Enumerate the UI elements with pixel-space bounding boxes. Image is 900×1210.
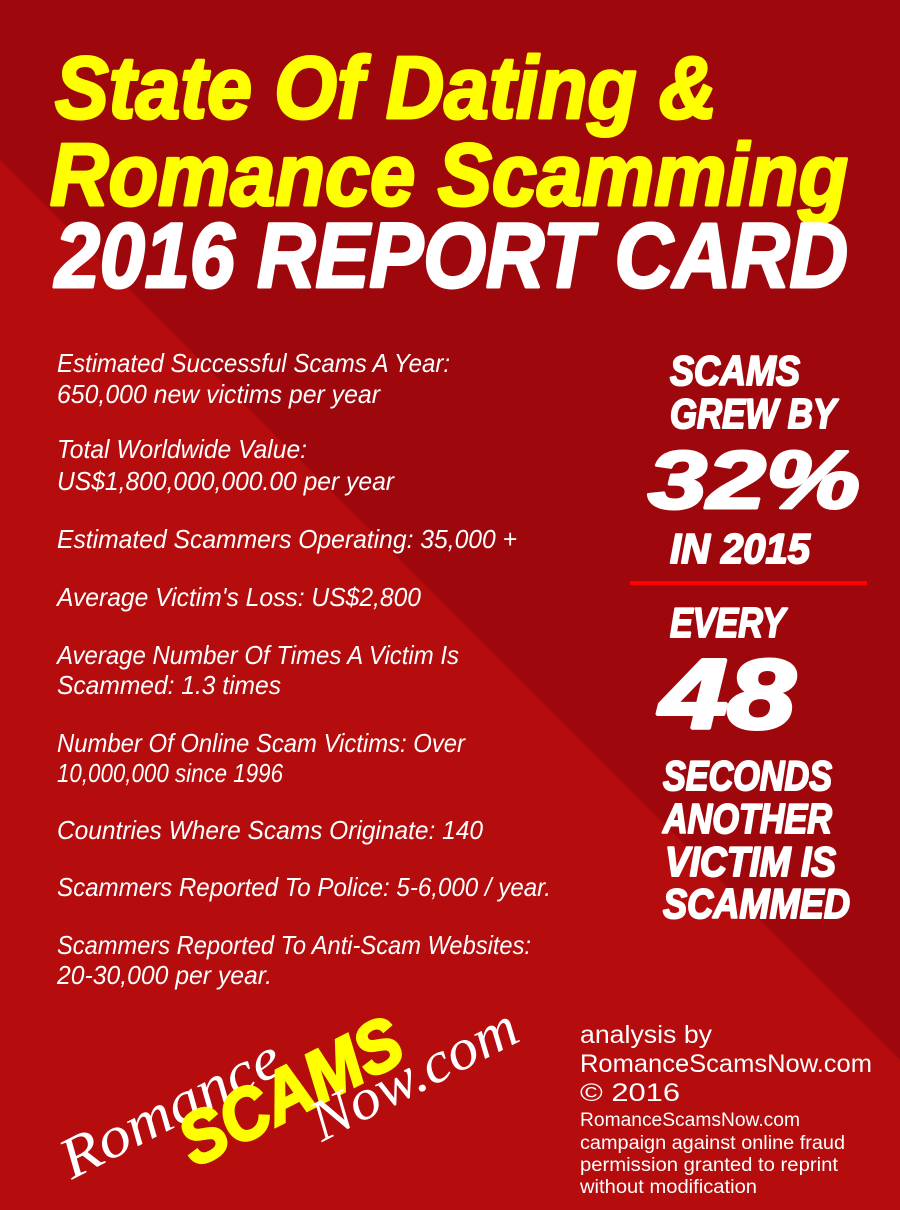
- credits: [579, 1021, 872, 1198]
- credits: © 2016: [580, 1079, 680, 1107]
- callout: growth: IN 2015: [670, 525, 811, 572]
- logo: Now.com: [297, 994, 528, 1154]
- logo: Romance: [47, 1024, 292, 1192]
- callout: growth: GREW BY: [670, 390, 839, 437]
- stats list: Countries Where Scams Originate: 140: [57, 815, 484, 845]
- stats list: Average Number Of Times A Victim Is: [55, 640, 459, 670]
- stats list: Estimated Successful Scams A Year:: [57, 348, 450, 378]
- callout: every 48 seconds: ANOTHER: [662, 795, 833, 842]
- callout: every 48 seconds: SCAMMED: [663, 880, 850, 927]
- stats list: 10,000,000 since 1996: [57, 758, 283, 788]
- logo: SCAMS: [166, 1002, 416, 1182]
- stats list: 20-30,000 per year.: [56, 960, 272, 990]
- stats list: Scammers Reported To Anti-Scam Websites:: [57, 930, 531, 960]
- stats list: Scammed: 1.3 times: [57, 670, 281, 700]
- title: Romance Scamming: [50, 125, 848, 224]
- stats list: Scammers Reported To Police: 5-6,000 / year.: [57, 872, 551, 902]
- credits: RomanceScamsNow.com: [580, 1050, 872, 1078]
- logo: [47, 922, 528, 1210]
- title: [50, 38, 848, 307]
- callout: every 48 seconds: SECONDS: [663, 752, 832, 799]
- stats list: US$1,800,000,000.00 per year: [57, 466, 395, 496]
- stats list: Estimated Scammers Operating: 35,000 +: [57, 524, 517, 554]
- credits: campaign against online fraud: [580, 1133, 845, 1154]
- credits: without modification: [579, 1177, 757, 1198]
- stats list: Number Of Online Scam Victims: Over: [57, 728, 466, 758]
- credits: permission granted to reprint: [580, 1155, 839, 1176]
- callout: every 48 seconds: EVERY: [670, 599, 788, 646]
- credits: RomanceScamsNow.com: [580, 1110, 800, 1131]
- stats list: [55, 348, 551, 990]
- callout: every 48 seconds: VICTIM IS: [665, 838, 836, 885]
- stats list: 650,000 new victims per year: [57, 379, 381, 409]
- callout: growth: [648, 347, 860, 572]
- callout: every 48 seconds: 48: [658, 639, 796, 749]
- title: State Of Dating &: [55, 38, 717, 137]
- callout: every 48 seconds: [658, 599, 850, 927]
- stats list: Total Worldwide Value:: [57, 434, 307, 464]
- callout: growth: 32%: [648, 435, 860, 526]
- credits: analysis by: [580, 1021, 713, 1049]
- stats list: Average Victim's Loss: US$2,800: [55, 582, 421, 612]
- callout: growth: SCAMS: [670, 347, 800, 394]
